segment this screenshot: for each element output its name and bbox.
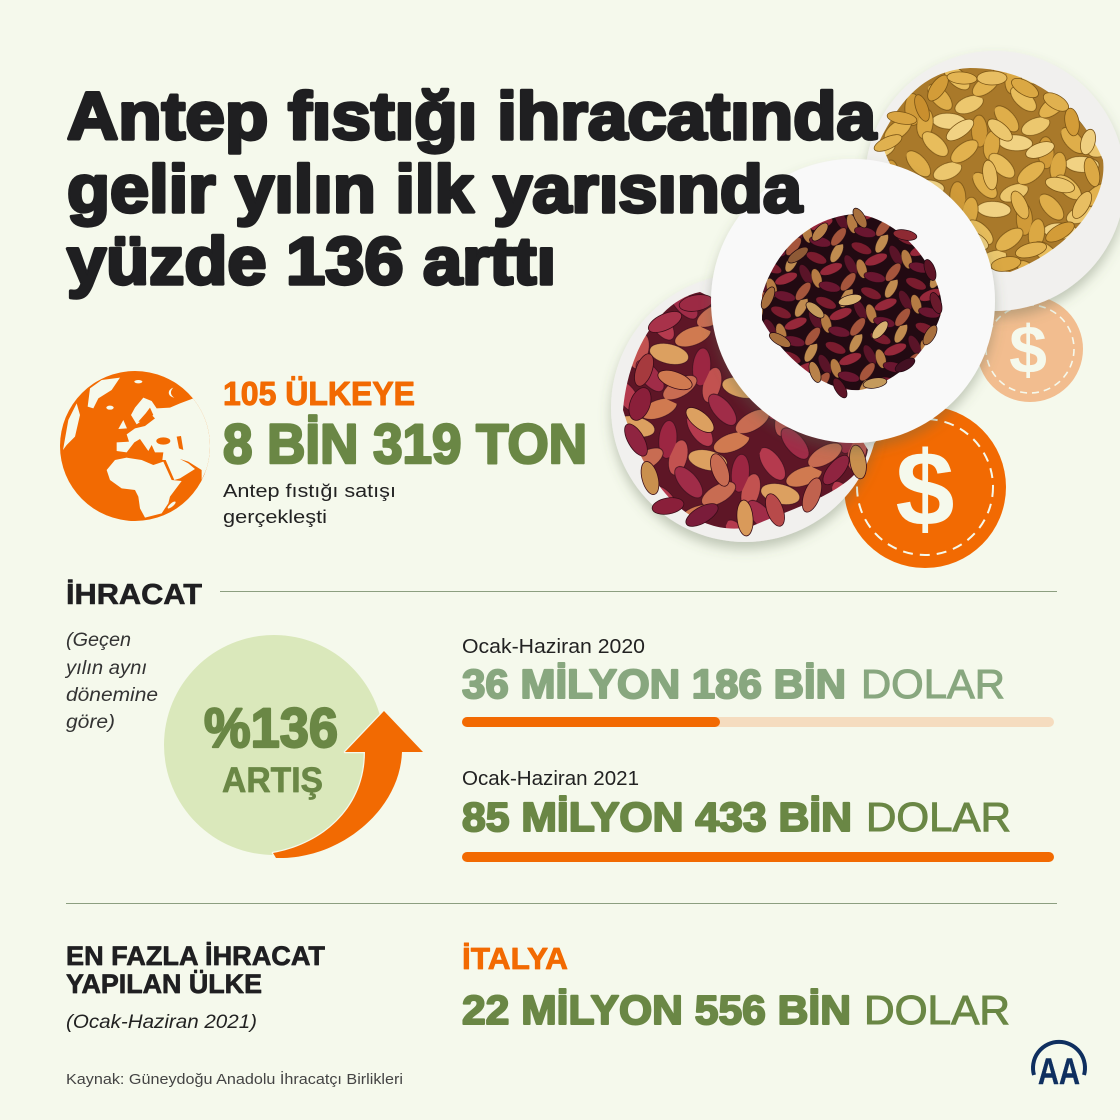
heading: top export country [66,941,326,999]
logo: AA [1033,1042,1085,1092]
row: 2021 export value: 85 MİLYON 433 BİN [462,794,852,840]
title [67,79,877,299]
stat: tonnage: 8 BİN 319 TON [223,412,587,475]
badge label: ARTIŞ [222,761,323,800]
note: comparison period: göre) [66,712,115,733]
stat: Italy export value: 22 MİLYON 556 BİN [462,987,851,1033]
row: 2021 export value: Ocak-Haziran 2021 [462,768,639,790]
row: 2020 export value [462,636,1054,727]
icon: small dollar coin: $ [1009,312,1047,388]
bar: 2021 [462,852,1054,862]
plate: dark red pistachios [611,274,879,542]
caption: tonnage [223,481,396,527]
title: yüzde 136 arttı [67,224,556,299]
badge value: %136 [204,696,338,759]
bar: 2020 [462,717,1054,727]
plate: golden pistachios [865,51,1120,311]
stat: Italy export value [462,987,1010,1033]
stat: Italy: İTALYA [462,941,568,976]
heading: top export country: YAPILAN ÜLKE [66,969,262,999]
badge: 136 percent increase [164,635,423,858]
plate: shelled pistachios [711,159,995,443]
note: comparison period: dönemine [66,685,158,706]
caption: tonnage: Antep fıstığı satışı [223,481,396,501]
icon: small dollar coin [977,296,1083,402]
row: 2020 export value: 36 MİLYON 186 BİN [462,661,846,707]
stat: country count: 105 ÜLKEYE [223,375,415,412]
note: comparison period: yılın aynı [64,658,147,679]
heading: export: İHRACAT [66,579,202,611]
stat: Italy export value: DOLAR [864,987,1010,1033]
arrow: increase [273,711,423,858]
icon: globe [60,371,218,521]
source: Kaynak: Güneydoğu Anadolu İhracatçı Birlikleri [66,1070,403,1088]
row: 2020 export value: Ocak-Haziran 2020 [462,636,645,658]
row: 2020 export value: DOLAR [861,661,1005,707]
row: 2021 export value [462,768,1054,862]
icon: large dollar coin: $ [896,430,954,548]
title: gelir yılın ilk yarısında [67,152,803,227]
note: comparison period [64,630,158,733]
note: comparison period: (Geçen [66,630,131,651]
icon: large dollar coin [844,406,1006,568]
row: 2021 export value: DOLAR [866,794,1011,840]
title: Antep fıstığı ihracatında [67,79,877,154]
caption: tonnage: gerçekleşti [223,507,327,527]
note: top export period: (Ocak-Haziran 2021) [66,1012,257,1033]
heading: top export country: EN FAZLA İHRACAT [66,941,326,971]
stat: exported tonnage [223,375,587,527]
logo: AA: AA [1038,1051,1080,1092]
